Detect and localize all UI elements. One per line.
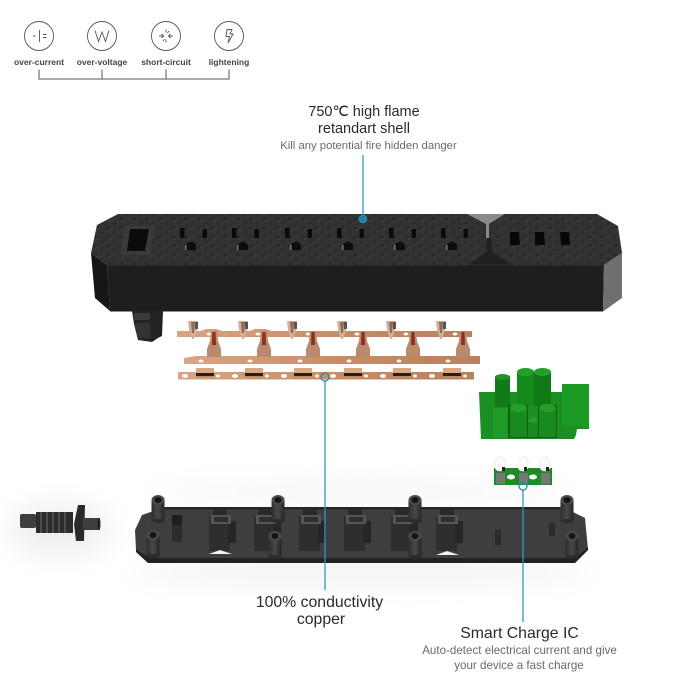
- strip 3: [178, 368, 474, 380]
- divider wedge top: [467, 214, 505, 238]
- divider wedge bottom: [469, 238, 511, 264]
- label: over-voltage: over-voltage: [77, 57, 128, 67]
- protection icons row: [14, 22, 249, 79]
- front blocks: [483, 407, 509, 438]
- heading: shell callout: [280, 104, 457, 152]
- shell pointer line: [359, 155, 367, 223]
- rear capacitor left: [495, 374, 510, 407]
- strip 2: [184, 331, 480, 364]
- front capacitors: [508, 404, 557, 438]
- label: lightening: lightening: [209, 57, 249, 67]
- copper pointer line: [321, 373, 329, 590]
- label: over-current: over-current: [14, 57, 64, 67]
- heading: copper callout: copper: [297, 611, 345, 628]
- square post: [172, 515, 182, 542]
- bottom housing: [135, 495, 588, 563]
- icon: over-voltage: [88, 22, 116, 50]
- cylindrical posts: [146, 495, 578, 559]
- label: short-circuit: short-circuit: [141, 57, 191, 67]
- small posts: [495, 523, 555, 545]
- tray rim: [136, 547, 588, 563]
- rear capacitor right: [534, 368, 551, 406]
- shell front face: [107, 265, 604, 312]
- IC pointer line: [519, 482, 527, 622]
- plug under shell: [132, 311, 163, 342]
- copper strips: [177, 321, 480, 380]
- soft background shadow: [10, 484, 590, 582]
- outlets: [180, 228, 468, 250]
- green circuit board: [479, 368, 589, 439]
- heading: IC callout: Auto-detect electrical current and give: [422, 644, 617, 657]
- square component: [562, 384, 589, 428]
- heading: shell callout: 750℃ high flame: [308, 104, 420, 120]
- strip 1: [177, 321, 472, 339]
- outlet housings: [209, 509, 463, 551]
- shell right side: [603, 253, 622, 312]
- icon: lightening: [214, 22, 244, 50]
- switch: [120, 226, 155, 255]
- heading: shell callout: retandart shell: [318, 121, 410, 137]
- heading: shell callout: Kill any potential fire hidden danger: [280, 140, 457, 152]
- icon: short-circuit: [152, 22, 180, 50]
- icon: over-current: [24, 22, 54, 50]
- shell top face: [91, 214, 622, 265]
- heading: copper callout: 100% conductivity: [256, 594, 383, 611]
- heading: IC callout: Smart Charge IC: [460, 625, 579, 642]
- power cord strain relief: [20, 505, 100, 541]
- bracket linking icons: [39, 70, 229, 79]
- heading: copper callout: [256, 594, 383, 628]
- shell left side: [91, 253, 110, 311]
- heading: IC callout: your device a fast charge: [454, 659, 584, 672]
- smart charge IC board: [494, 457, 552, 485]
- USB ports: [510, 232, 570, 245]
- tray: [135, 507, 588, 563]
- power strip shell: [91, 214, 622, 312]
- rear capacitor middle: [517, 368, 534, 406]
- heading: IC callout: [422, 625, 617, 672]
- board base: [479, 392, 589, 439]
- base notches: [209, 550, 459, 555]
